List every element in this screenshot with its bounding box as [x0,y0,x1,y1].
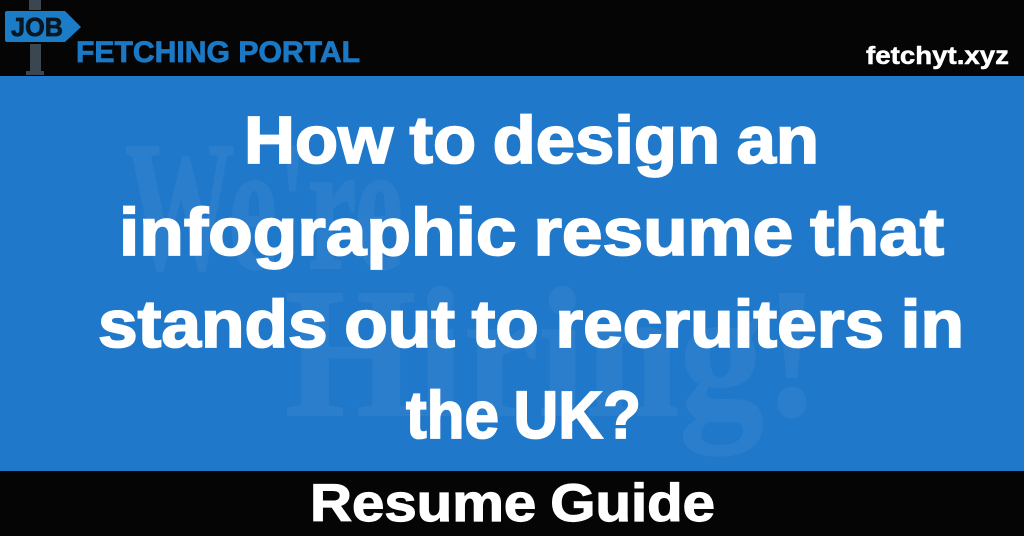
watermark: We're Hiring [125,104,820,456]
site url: fetchyt.xyz [866,42,1009,70]
footer label: Resume Guide [310,474,715,533]
watermark: We're Hiring: Hiring! [285,251,820,456]
headline: stands out to recruiters in [98,287,964,362]
logo wordmark: FETCHING PORTAL [76,36,360,69]
bottom footer bar [0,471,1024,536]
watermark: We're Hiring: We're [125,104,403,309]
icon: signpost: JOB [11,12,63,42]
logo: Job Fetching Portal [5,0,360,75]
headline: the UK? [406,378,641,453]
headline: infographic resume that [119,195,944,270]
icon: signpost [5,0,81,75]
top header bar [0,0,1024,76]
headline: How to design an [244,103,819,178]
main blue panel [0,76,1024,471]
headline [98,103,964,453]
